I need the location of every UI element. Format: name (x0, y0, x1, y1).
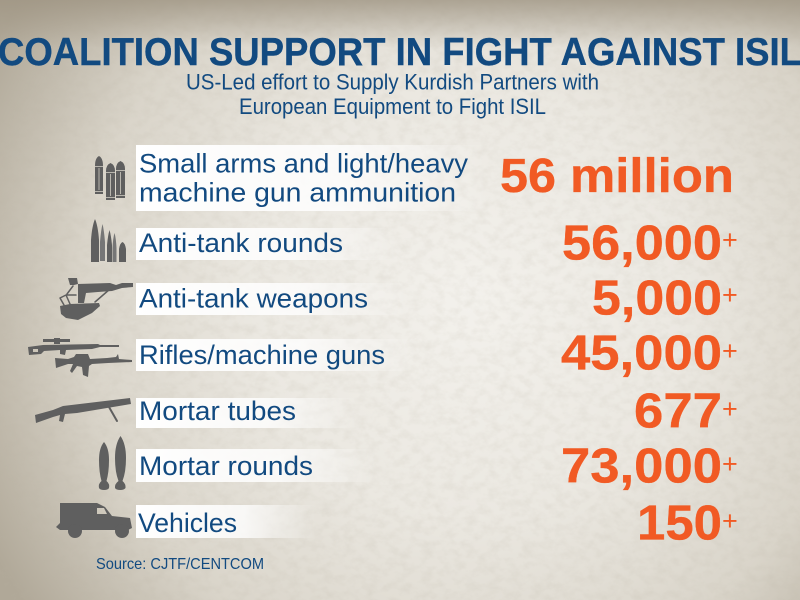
label: Anti-tank weapons (139, 284, 368, 314)
label: Mortar tubes (139, 396, 296, 426)
row: anti-tank rounds (91, 216, 738, 270)
subtitle (186, 70, 599, 119)
row: rifles and machine guns (28, 326, 738, 380)
value: 5,000 (592, 272, 722, 326)
value: + (722, 506, 738, 536)
label: Rifles/machine guns (139, 340, 385, 370)
row: small arms ammunition (95, 145, 734, 211)
source: Source: CJTF/CENTCOM (96, 556, 264, 573)
value: 45,000 (561, 326, 722, 380)
icon: rifles (28, 338, 132, 377)
icon: bullets (95, 156, 125, 200)
value: 73,000 (561, 440, 722, 494)
row: mortar rounds (99, 436, 738, 494)
value: 677 (634, 384, 722, 438)
value: 56,000 (562, 216, 722, 270)
label: Small arms and light/heavy (139, 148, 468, 178)
label: machine gun ammunition (139, 178, 456, 208)
icon: mounted anti-tank weapon (60, 278, 133, 320)
icon: shells (91, 219, 126, 262)
label: Vehicles (138, 508, 237, 538)
value: 150 (637, 496, 722, 550)
icon: mortar tube (35, 398, 131, 423)
value: + (722, 280, 738, 310)
subtitle: European Equipment to Fight ISIL (239, 94, 546, 119)
value: + (722, 394, 738, 424)
label (139, 148, 468, 208)
label: Anti-tank rounds (139, 228, 343, 258)
row: vehicles (56, 496, 738, 550)
row: anti-tank weapons (60, 272, 738, 326)
label: Mortar rounds (139, 451, 313, 481)
value: million (570, 150, 734, 203)
value (500, 150, 734, 203)
subtitle: US-Led effort to Supply Kurdish Partners with (186, 70, 599, 94)
value: + (722, 336, 738, 366)
row: mortar tubes (35, 384, 738, 438)
value: 56 (500, 150, 556, 203)
icon: mortar rounds (99, 436, 126, 490)
icon: vehicle (56, 503, 132, 538)
value: + (722, 225, 738, 255)
value: + (722, 449, 738, 479)
